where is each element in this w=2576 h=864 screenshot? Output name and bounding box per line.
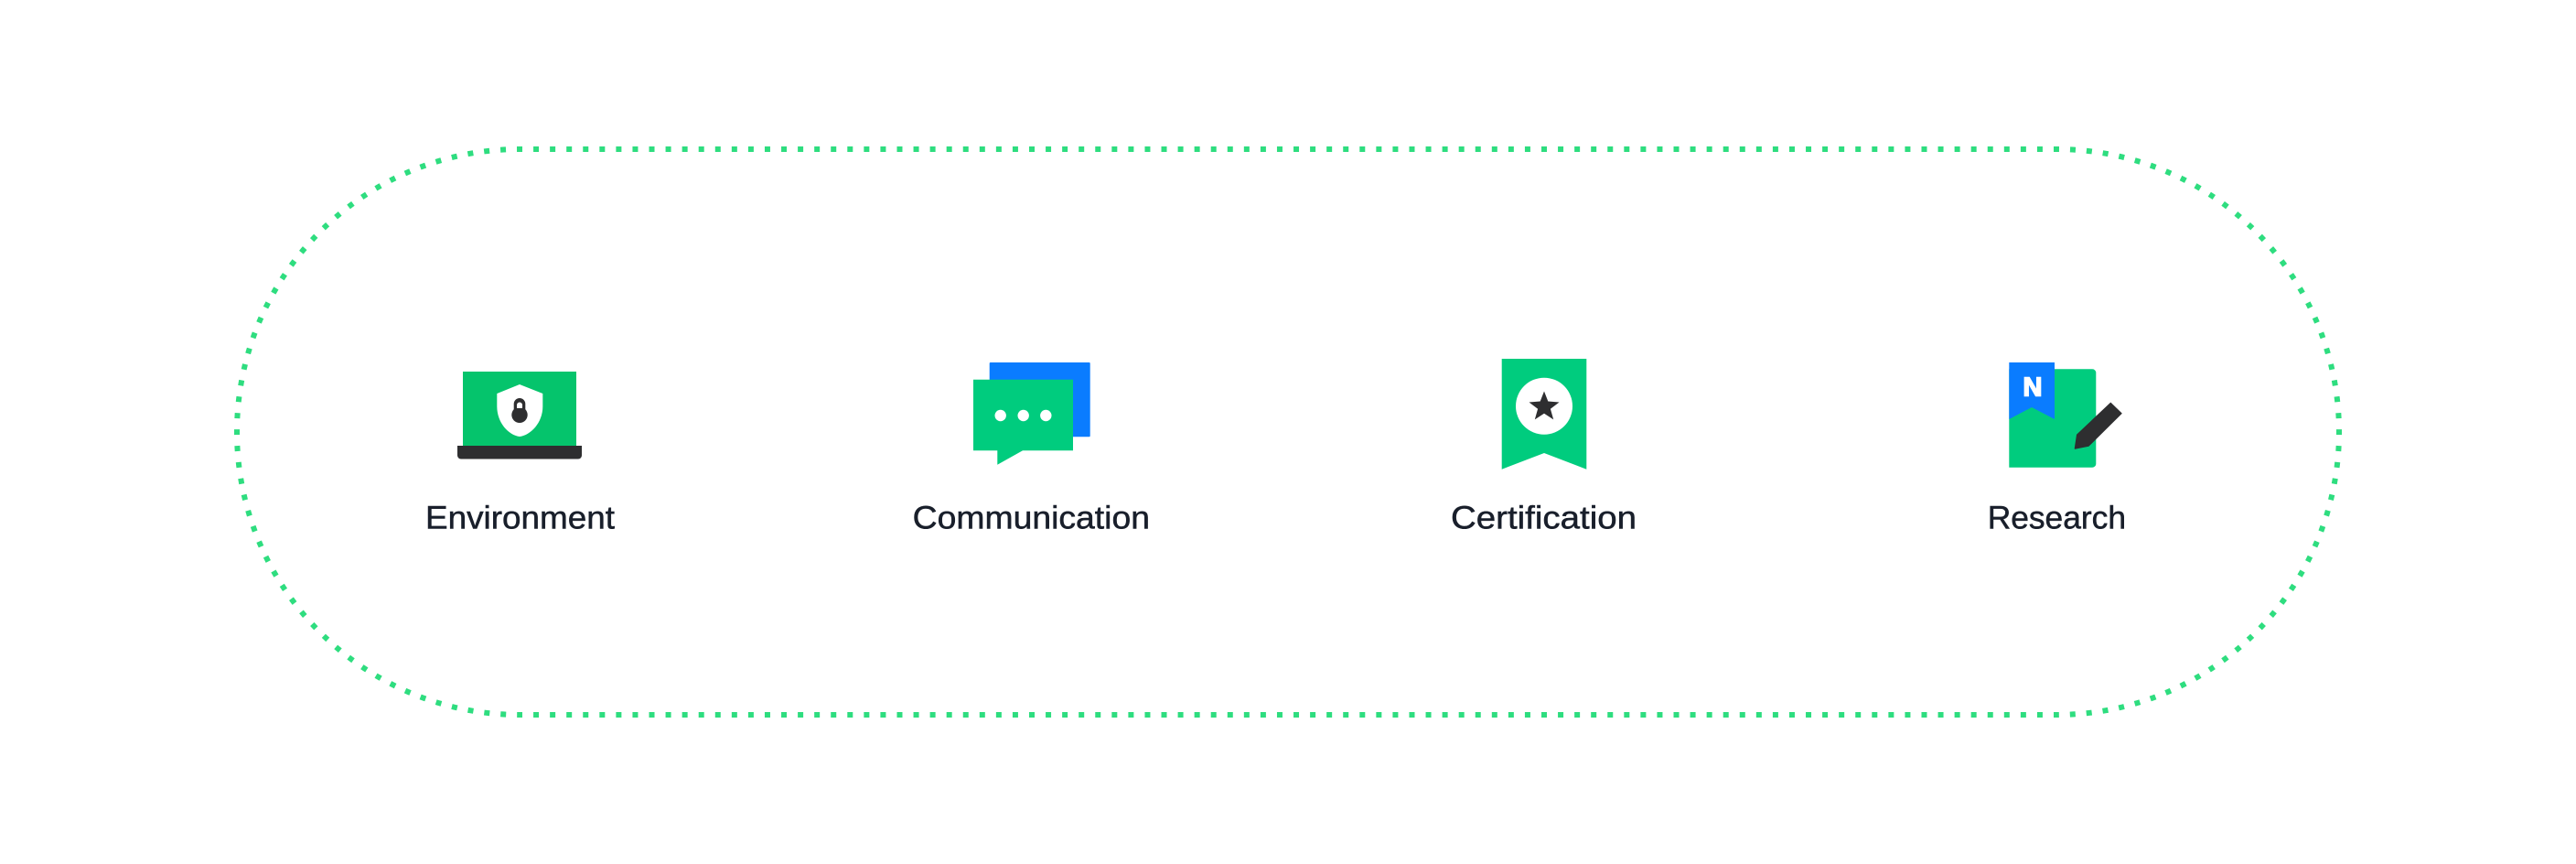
icon: notebook with bookmark and pen: N: [2023, 373, 2042, 403]
item: Environment: [425, 372, 615, 535]
icon: ribbon badge with star: [1502, 359, 1586, 470]
item: Communication: [913, 362, 1150, 535]
label: Certification: Certification: [1451, 500, 1637, 535]
icon: laptop with security shield: [457, 372, 582, 459]
item: Certification: [1451, 359, 1637, 535]
icon: notebook with bookmark and pen: [2009, 362, 2121, 468]
label: Environment: Environment: [425, 500, 615, 535]
item: Research: [1988, 362, 2126, 535]
label: Communication: Communication: [913, 500, 1150, 535]
label: Research: Research: [1988, 500, 2126, 535]
icon: speech bubbles: [973, 362, 1090, 465]
dotted pill outline: [237, 149, 2339, 715]
